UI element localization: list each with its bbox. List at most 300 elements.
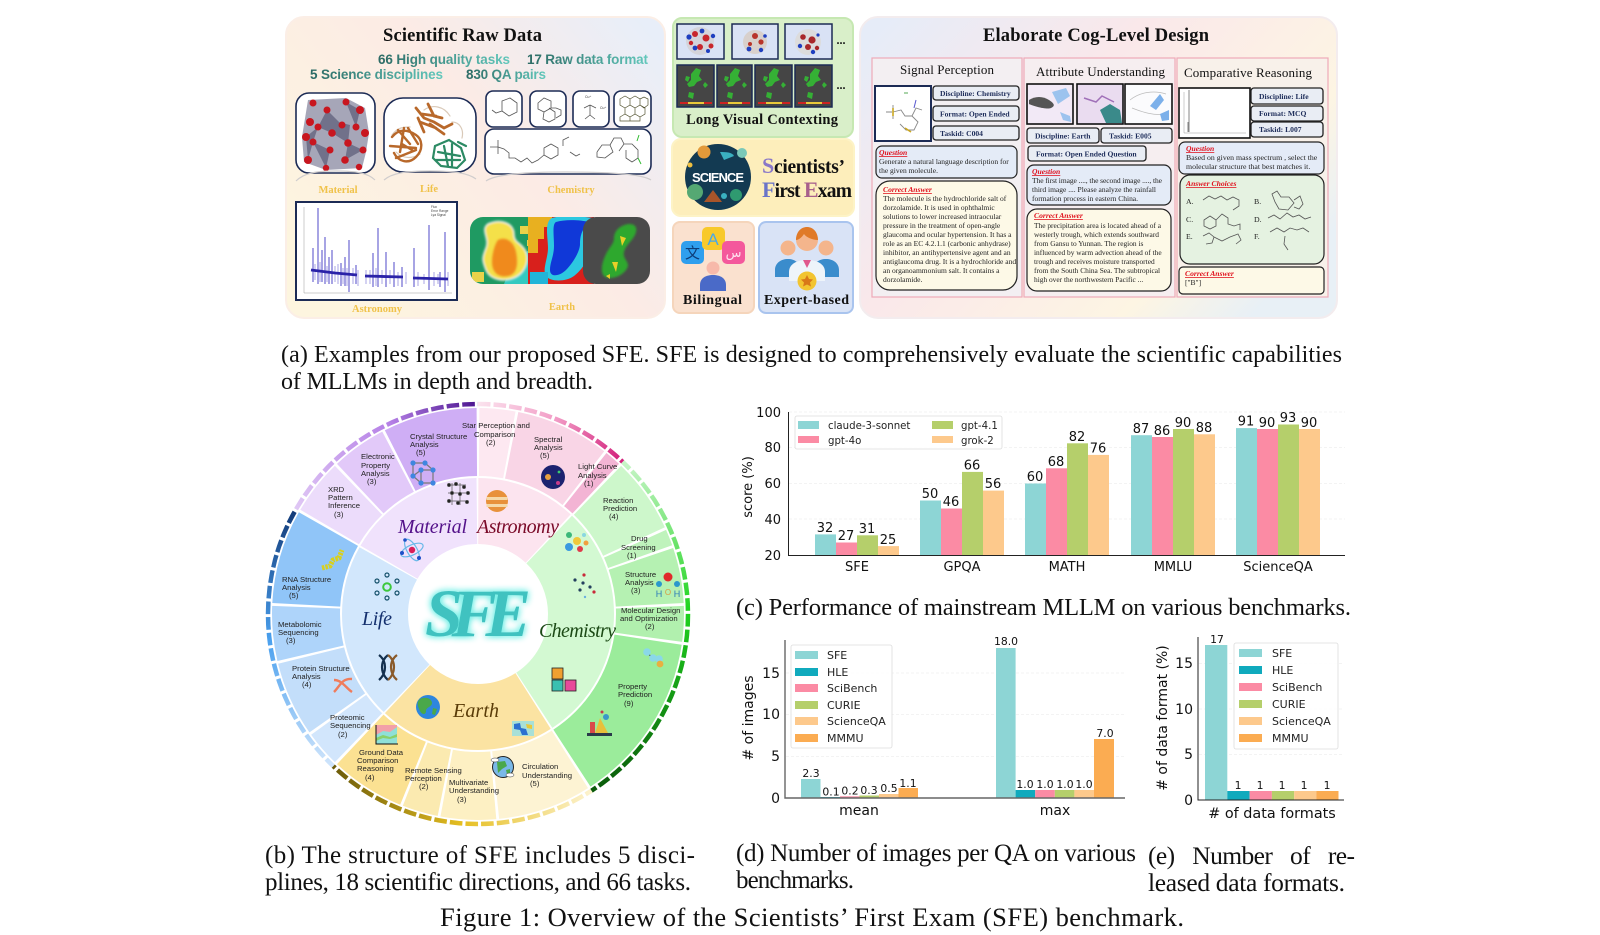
label: life: Life [420, 184, 438, 195]
task labels: Perception [405, 774, 442, 783]
inner ring: disciplines [375, 511, 581, 717]
panel: scientists first exam [672, 139, 854, 216]
legend: claude-3-sonnet [828, 421, 910, 432]
task labels [278, 421, 680, 804]
card: attribute understanding [1024, 58, 1175, 297]
y tick labels: 5 [1184, 747, 1193, 763]
discipline label: chemistry: Chemistry [539, 620, 616, 642]
icon: atom [399, 537, 425, 563]
icon: water molecule [656, 572, 680, 599]
task labels: Comparison [357, 756, 398, 765]
card: comparative reasoning [1177, 58, 1328, 297]
radar thumbnails [677, 65, 832, 107]
value labels: 90 [1301, 416, 1317, 431]
center title: SFE: SFE [425, 575, 531, 651]
caption (b): plines, 18 scientific directions, and 66 tasks. [265, 869, 691, 896]
title: scientists first exam: First Exam [762, 177, 852, 202]
x axis label: # of data formats [1208, 806, 1336, 822]
label: long visual contexting: Long Visual Contexting [686, 112, 839, 128]
bar chart (d): images per QA [741, 635, 1125, 819]
value labels: 25 [880, 533, 896, 548]
value labels: 56 [985, 477, 1001, 492]
icon: earth circulation [491, 756, 514, 778]
value labels: 1.0 [1075, 778, 1093, 791]
legend [791, 645, 892, 748]
info tags: Format: MCQ [1259, 109, 1307, 118]
value labels: 0.1 [822, 786, 840, 798]
value labels: 87 [1133, 422, 1149, 437]
value labels: 82 [1069, 430, 1085, 445]
heading: signal perception: Signal Perception [900, 62, 994, 77]
answer box: trough and receives moisture transported [1034, 257, 1155, 266]
stats text block: 17 Raw data format [527, 52, 648, 67]
x category labels: mean [839, 803, 879, 819]
panel: scientific raw data [286, 17, 665, 318]
weather map images [1027, 84, 1172, 124]
task labels: Metabolomic [278, 620, 322, 629]
question box [876, 146, 1017, 178]
task labels: Analysis [282, 583, 311, 592]
icon: language bubbles: 文 [685, 245, 700, 262]
discipline label: life: Life [361, 608, 392, 630]
task labels: Prediction [603, 504, 637, 513]
task labels: Analysis [292, 672, 321, 681]
answer box: an organoammonium salt. It contains a [883, 266, 1000, 275]
task labels: Structure [625, 570, 656, 579]
answer choices box [1180, 175, 1324, 264]
image: chemistry molecules: Cu⁺ [585, 95, 591, 99]
task labels: (2) [486, 438, 496, 447]
answer box: solutions to lower increased intraocular [883, 212, 1002, 221]
task labels: Spectral [534, 435, 562, 444]
value labels: 66 [964, 458, 980, 474]
value labels: 7.0 [1096, 727, 1114, 740]
icon: black lattice [447, 482, 470, 505]
legend: gpt-4.1 [961, 421, 998, 432]
dashed outer band [268, 404, 688, 824]
heading: attribute understanding: Attribute Understanding [1036, 64, 1166, 79]
value labels: 0.5 [880, 782, 898, 795]
value labels: 68 [1048, 455, 1064, 470]
task labels: (4) [365, 773, 375, 782]
heading: scientific raw data: Scientific Raw Data [383, 26, 542, 46]
task labels: (5) [540, 451, 550, 460]
value labels: 60 [1027, 470, 1043, 485]
legend: SFE [1272, 647, 1292, 660]
value labels: 18.0 [994, 635, 1018, 648]
task labels: Molecular Design [621, 606, 680, 615]
answer choices box: D. [1254, 215, 1262, 224]
answer box: inhibitor, an antihypertensive agent and an [883, 248, 1011, 257]
label: material: Material [318, 185, 358, 196]
answer choices box: A. [1186, 197, 1194, 206]
y tick labels: 15 [1175, 656, 1193, 672]
card: signal perception [872, 58, 1022, 297]
ellipsis row 2: ... [836, 78, 846, 92]
icon: water molecule: H [656, 589, 662, 599]
question box: third image .... Please analyze the rainfall [1032, 185, 1156, 194]
answer box: westerly trough, which extends southward [1034, 230, 1159, 239]
answer choices box: C. [1186, 215, 1193, 224]
gridlines [786, 673, 1125, 756]
task labels: (5) [530, 779, 540, 788]
value labels [1210, 633, 1330, 792]
info tags: Discipline: Life [1259, 92, 1309, 101]
icon: crystal lattice [410, 460, 436, 486]
task labels: Reasoning [357, 764, 394, 773]
info tags [1027, 128, 1172, 161]
correct answer box: Correct Answer [1185, 269, 1235, 278]
task labels: Ground Data [359, 748, 403, 757]
category labels: MATH [1049, 560, 1085, 575]
answer box: from the South China Sea. The subtropical [1034, 266, 1160, 275]
legend: SciBench [827, 682, 877, 695]
task labels: Crystal Structure [410, 432, 467, 441]
task labels: Analysis [410, 440, 439, 449]
image: chemistry molecules: Cu⁺ [600, 106, 606, 110]
value labels: 32 [817, 521, 833, 536]
answer box: role as an EC 4.2.1.1 (carbonic anhydrase) [883, 239, 1011, 248]
caption (d) [736, 840, 1136, 894]
legend: MMMU [827, 732, 864, 745]
label: bilingual: Bilingual [683, 293, 742, 308]
value labels: 88 [1196, 421, 1212, 436]
legend: gpt-4o [828, 436, 861, 447]
stats text block: 66 High quality tasks [378, 52, 510, 67]
caption (e) [1148, 841, 1355, 897]
value labels: 1.0 [1016, 778, 1034, 791]
discipline label: astronomy: Astronomy [475, 516, 559, 538]
thumbnail reflections [296, 171, 651, 181]
icon: experts with medal [775, 227, 839, 290]
icon: small molecule [573, 573, 596, 598]
answer box: high over the northwestern Pacific ... [1034, 275, 1143, 284]
legend: CURIE [827, 699, 861, 712]
answer choices box: Answer Choices [1185, 179, 1236, 188]
image: molecule [875, 86, 931, 141]
icon: dark DNA helices [379, 655, 397, 680]
value labels: 17 [1210, 633, 1224, 646]
task labels: Property [618, 682, 647, 691]
value labels: 27 [838, 529, 854, 544]
question box: Generate a natural language description for [879, 157, 1009, 166]
value labels: 1 [1257, 779, 1263, 792]
answer box: dorzolamide. It is used in ophthalmic [883, 203, 995, 212]
caption (d): (d) Number of images per QA on various [736, 840, 1136, 867]
heading: comparative reasoning: Comparative Reasoning [1184, 65, 1312, 80]
caption (d): benchmarks. [736, 867, 854, 894]
title: scientists first exam [762, 153, 852, 202]
axes [785, 640, 1125, 798]
answer box [1027, 209, 1171, 291]
y tick labels: 60 [764, 477, 781, 492]
icon: language bubbles: A [707, 230, 719, 249]
y tick labels: 15 [762, 666, 780, 682]
icon: language bubbles [681, 227, 745, 291]
task labels: Understanding [449, 786, 499, 795]
question box: Question [1186, 144, 1214, 153]
category labels: MMLU [1154, 560, 1192, 575]
icon: temperature chart [376, 725, 398, 744]
task labels: Analysis [578, 471, 607, 480]
bars [1205, 645, 1338, 800]
task labels: (1) [584, 479, 594, 488]
value labels: 90 [1175, 416, 1191, 431]
legend: grok-2 [961, 436, 994, 447]
image: astronomy spectrum: Lya Signal [431, 213, 446, 217]
panel: bilingual [673, 222, 754, 313]
task labels: Star Perception and [462, 421, 530, 430]
answer box: Correct Answer [883, 185, 933, 194]
label: chemistry: Chemistry [547, 185, 595, 196]
category labels [845, 560, 1313, 575]
info tags: Taskid: E005 [1109, 132, 1152, 140]
axes [1198, 637, 1344, 800]
x category labels: max [1040, 803, 1070, 819]
value labels [817, 411, 1317, 548]
info tags: Format: Open Ended [940, 110, 1010, 118]
task labels: Protein Structure [292, 664, 350, 673]
task labels: (9) [624, 699, 634, 708]
info tags: Discipline: Chemistry [940, 89, 1011, 98]
task labels: Comparison [474, 430, 515, 439]
question box [1179, 142, 1324, 174]
icon: galaxy [541, 465, 565, 489]
icon: lab flask [587, 710, 612, 736]
task labels: (3) [631, 586, 641, 595]
legend [1234, 643, 1338, 749]
question box: formation process in eastern China. [1032, 194, 1138, 203]
task labels: Sequencing [278, 628, 319, 637]
title: scientists first exam: Scientists’ [762, 153, 845, 178]
legend: MMMU [1272, 732, 1309, 745]
image: astronomy spectrum [296, 202, 457, 300]
task labels: Circulation [522, 762, 558, 771]
legend: ScienceQA [827, 715, 886, 728]
task labels: Remote Sensing [405, 766, 462, 775]
task labels: Proteomic [330, 713, 365, 722]
label: earth: Earth [549, 302, 575, 313]
info tags [933, 86, 1019, 140]
task labels: (2) [419, 782, 429, 791]
image: life protein [384, 98, 476, 172]
task labels: Pattern [328, 493, 353, 502]
task labels: Inference [328, 501, 360, 510]
task labels: Electronic [361, 452, 395, 461]
category labels: GPQA [943, 560, 981, 575]
value labels: 1.1 [899, 777, 917, 790]
category labels: ScienceQA [1243, 560, 1313, 575]
answer box: dorzolamide. [883, 275, 922, 284]
icon: globe [416, 695, 440, 719]
y tick labels: 0 [771, 791, 780, 807]
y axis label: # of images [741, 675, 757, 761]
icon: science globe [685, 144, 751, 210]
value labels: 50 [922, 487, 938, 502]
icon: chain molecule [643, 648, 663, 667]
value labels: 1 [1324, 779, 1330, 792]
legend: SciBench [1272, 681, 1322, 694]
image: chemistry molecules [485, 91, 651, 174]
y tick labels [756, 406, 781, 564]
value labels: 0.2 [841, 784, 859, 798]
y tick labels: 5 [771, 749, 780, 765]
value labels: 2.3 [802, 767, 820, 780]
answer choices box: F. [1254, 232, 1260, 241]
value labels: 86 [1154, 424, 1170, 439]
task labels: (5) [416, 448, 426, 457]
gridlines [789, 412, 1345, 519]
label: astronomy: Astronomy [352, 304, 403, 315]
icon: map [512, 721, 534, 736]
value labels: 0.3 [860, 784, 878, 797]
value labels: 91 [1238, 414, 1254, 430]
y tick labels: 100 [756, 406, 781, 421]
y tick labels: 40 [764, 513, 781, 528]
answer box: pressure in the treatment of open-angle [883, 221, 1001, 230]
value labels: 31 [859, 522, 875, 537]
ellipsis row 1: ... [836, 33, 846, 47]
icon: molecule cluster [565, 532, 588, 552]
answer box [876, 181, 1017, 290]
task labels: (3) [286, 636, 296, 645]
label: expert-based: Expert-based [764, 293, 849, 308]
icon: science globe: SCIENCE [692, 170, 744, 185]
task labels: Prediction [618, 690, 652, 699]
figure title: Figure 1: Overview of the Scientists’ First Exam (SFE) benchmark. [440, 902, 1184, 932]
bar chart (e): data formats [1155, 633, 1344, 822]
answer choices box: E. [1186, 232, 1193, 241]
gridlines [1199, 664, 1344, 754]
answer box: Correct Answer [1034, 211, 1084, 220]
task labels: Multivariate [449, 778, 488, 787]
legend: HLE [1272, 664, 1293, 677]
task labels: (5) [289, 591, 299, 600]
value labels: 1.0 [1036, 778, 1054, 791]
task labels: XRD [328, 485, 344, 494]
image: earth maps [470, 216, 650, 284]
answer box: antiglaucoma drug. It is a hydrochloride and [883, 257, 1016, 266]
task labels: (3) [367, 477, 377, 486]
question box: The first image ...., the second image ...., the [1032, 176, 1163, 185]
panel: expert-based [759, 222, 853, 313]
task labels: (3) [334, 510, 344, 519]
icon: language bubbles: س [726, 246, 741, 261]
value labels: 46 [943, 495, 959, 510]
task labels: Drug [631, 534, 648, 543]
image: mass spectrum [1179, 88, 1250, 138]
question box [1027, 165, 1171, 205]
value labels: 1 [1279, 779, 1285, 792]
info tags: Taskid: C004 [940, 129, 983, 138]
caption (c): (c) Performance of mainstream MLLM on various benchmarks. [736, 594, 1351, 621]
correct answer box: ["B"] [1185, 278, 1201, 287]
y tick labels [1175, 656, 1193, 809]
value labels: 76 [1090, 442, 1106, 456]
task labels: Understanding [522, 771, 572, 780]
heading: elaborate cog-level design: Elaborate Cog-Level Design [983, 26, 1210, 46]
icon: water molecule: H [674, 589, 680, 599]
info tags: Taskid: L007 [1259, 125, 1302, 134]
legend: SFE [827, 649, 847, 662]
value labels: 1 [1301, 779, 1307, 792]
value labels: 1.0 [1056, 778, 1074, 791]
outer ring: tasks [306, 442, 650, 786]
task labels: RNA Structure [282, 575, 331, 584]
bar chart (c): performance of MLLMs [741, 406, 1345, 575]
task labels: Light Curve [578, 462, 617, 471]
stats text block: 5 Science disciplines [310, 67, 443, 82]
info tags: Format: Open Ended Question [1036, 150, 1137, 158]
task labels: (2) [338, 730, 348, 739]
question box: molecular structure that best matches it. [1186, 162, 1310, 171]
task labels: (1) [627, 551, 637, 560]
task labels: Screening [621, 543, 656, 552]
task labels: Analysis [534, 443, 563, 452]
question box: the given molecule. [879, 166, 938, 175]
answer box: from Gansu to Yunnan. The region is [1034, 239, 1144, 248]
x category labels [839, 803, 1070, 819]
legend [795, 416, 1002, 449]
wheel chart: SFE structure [268, 404, 688, 824]
legend: ScienceQA [1272, 715, 1331, 728]
answer choices box: B. [1254, 197, 1261, 206]
value labels: 1 [1235, 779, 1241, 792]
question box: Question [1032, 167, 1060, 176]
panel: long visual contexting [673, 18, 853, 137]
task labels: Analysis [625, 578, 654, 587]
info tags: Discipline: Earth [1035, 132, 1091, 140]
task labels: (4) [302, 680, 312, 689]
discipline label: material: Material [397, 516, 467, 538]
icon: colored DNA [334, 679, 352, 692]
y tick labels: 20 [764, 549, 781, 564]
value labels: 90 [1259, 416, 1275, 431]
image: astronomy spectrum: Flux [431, 205, 437, 209]
category labels: SFE [845, 560, 869, 575]
icon: cell network [375, 573, 399, 600]
answer box: The molecule is the hydrochloride salt of [883, 194, 1007, 203]
caption (b) [265, 842, 695, 896]
caption (b): (b) The structure of SFE includes 5 disci- [265, 842, 695, 869]
y axis label: score (%) [741, 456, 756, 518]
answer box: influenced by warm advection ahead of the [1034, 248, 1162, 257]
stats text block: 830 QA pairs [466, 67, 546, 82]
correct answer box [1179, 267, 1324, 294]
bars [815, 424, 1320, 555]
y tick labels: 80 [764, 441, 781, 456]
discipline label: earth: Earth [452, 700, 499, 722]
answer box: glaucoma and ocular hypertension. It has a [883, 230, 1012, 239]
y tick labels: 0 [1184, 793, 1193, 809]
value labels [802, 635, 1114, 798]
task labels: Property [361, 461, 390, 470]
icon: water molecule: O [665, 588, 671, 597]
y tick labels [762, 666, 780, 807]
caption (a): (a) Examples from our proposed SFE. SFE is designed to comprehensively evaluate the scientific capabilities [281, 342, 1342, 368]
protein thumbnails [677, 24, 832, 59]
y tick labels: 10 [762, 707, 780, 723]
bars [801, 648, 1114, 798]
question box: Based on given mass spectrum , select the [1186, 153, 1318, 162]
caption (a) [281, 342, 1342, 395]
legend: CURIE [1272, 698, 1306, 711]
info tags [1251, 88, 1323, 137]
caption (e): leased data formats. [1148, 868, 1345, 897]
task labels: Sequencing [330, 721, 371, 730]
axes [788, 412, 1345, 556]
task labels: and Optimization [620, 614, 678, 623]
